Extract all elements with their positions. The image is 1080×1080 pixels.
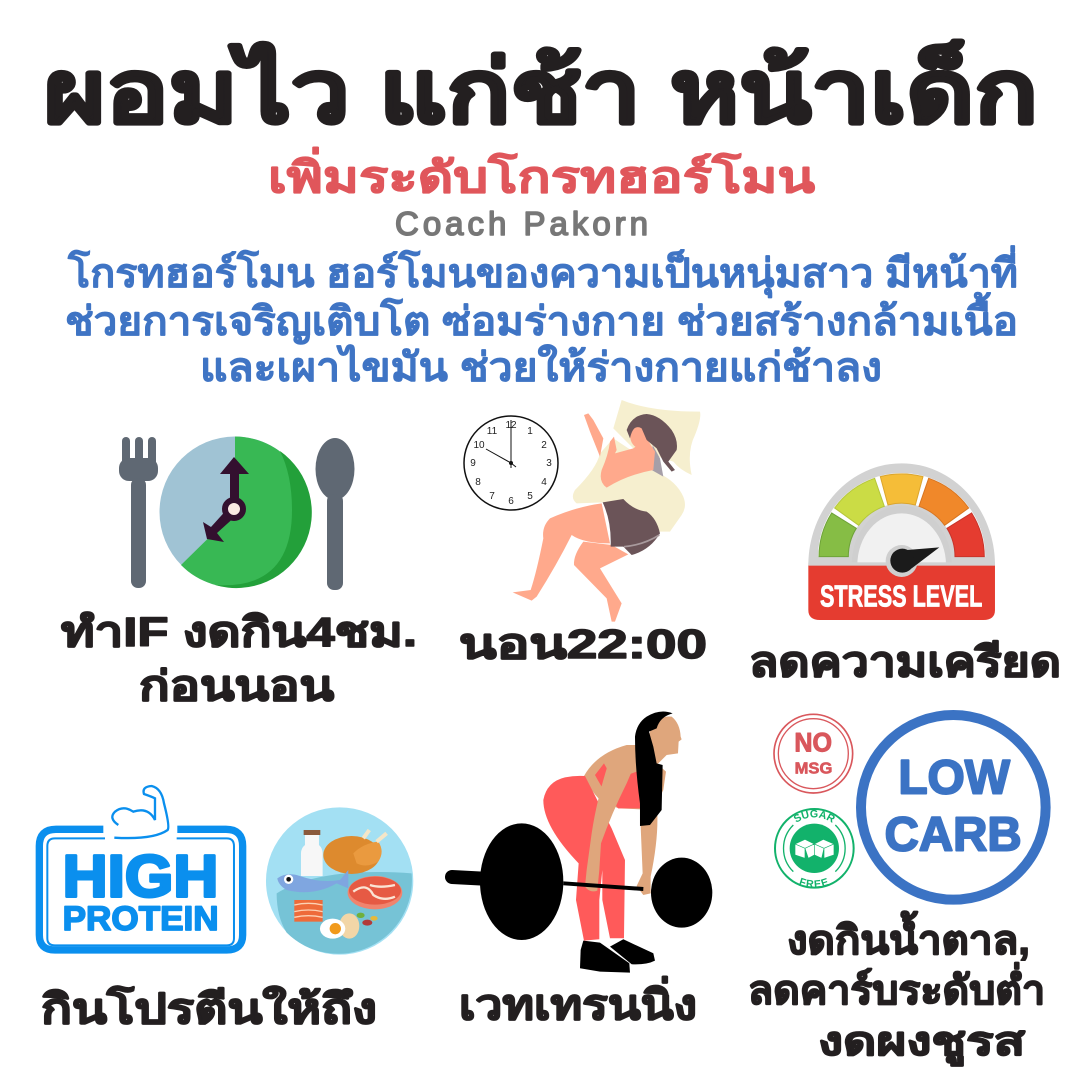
intro paragraph: และเผาไขมัน ช่วยให้ร่างกายแก่ช้าลง (200, 344, 882, 390)
icon: wall clock at ten (464, 416, 558, 510)
label: IF fasting: ทำIF งดกิน4ชม. (61, 609, 417, 655)
illustration: sleeping woman (513, 400, 700, 622)
badge: sugar free: FREE (800, 878, 828, 887)
intro paragraph: โกรทฮอร์โมน ฮอร์โมนของความเป็นหนุ่มสาว มีหน้าที่ (67, 245, 1018, 299)
icon: stress level gauge (808, 463, 995, 620)
icon: wall clock at ten: 6 (508, 496, 514, 507)
intro paragraph: ช่วยการเจริญเติบโต ซ่อมร่างกาย ช่วยสร้างกล้ามเนื้อ (65, 292, 1018, 345)
icon: stress level gauge: STRESS LEVEL (820, 580, 982, 614)
badge: no MSG: MSG (795, 760, 832, 777)
icon: wall clock at ten: 11 (487, 426, 498, 437)
label: sleep by 22:00: นอน22:00 (459, 621, 707, 667)
label: reduce stress: ลดความเครียด (749, 639, 1061, 685)
label: diet rules: งดผงชูรส (818, 1020, 1026, 1066)
icon: wall clock at ten: 9 (470, 458, 476, 469)
icon: wall clock at ten: 12 (505, 420, 517, 431)
label: diet rules (748, 911, 1045, 1066)
label: eat enough protein: กินโปรตีนให้ถึง (41, 985, 377, 1032)
icon: protein food plate (266, 807, 413, 955)
title: ผอมไว แก่ช้า หน้าเด็ก (44, 38, 1038, 141)
icon: intermittent fasting plate clock (119, 436, 354, 590)
subtitle: เพิ่มระดับโกรทฮอร์โมน (268, 147, 816, 202)
badge: high protein: HIGH (63, 843, 218, 910)
badge: low carb: CARB (885, 808, 1022, 862)
badge: low carb (861, 715, 1046, 900)
icon: wall clock at ten: 1 (527, 426, 533, 437)
label: weight training: เวทเทรนนิ่ง (459, 976, 697, 1028)
badge: sugar free: SUGAR (794, 810, 835, 823)
badge: sugar free (774, 808, 855, 889)
label: diet rules: งดกินน้ำตาล, (787, 911, 1030, 963)
icon: wall clock at ten: 5 (527, 491, 533, 502)
icon: wall clock at ten: 4 (541, 477, 547, 488)
icon: wall clock at ten: 10 (473, 440, 485, 451)
icon: wall clock at ten: 8 (475, 477, 481, 488)
icon: wall clock at ten: 3 (546, 458, 552, 469)
badge: high protein (39, 786, 243, 950)
badge: no MSG: NO (794, 728, 832, 758)
badge: low carb: LOW (898, 750, 1010, 804)
icon: wall clock at ten: 7 (489, 491, 495, 502)
label: IF fasting: ก่อนนอน (139, 663, 334, 709)
author name: Coach Pakorn (395, 205, 648, 242)
label: IF fasting (61, 609, 417, 709)
label: diet rules: ลดคาร์บระดับต่ำ (748, 962, 1045, 1013)
badge: high protein: PROTEIN (63, 900, 219, 938)
illustration: woman deadlifting barbell (452, 711, 712, 973)
icon: wall clock at ten: 2 (541, 440, 547, 451)
badge: no MSG (774, 714, 853, 793)
intro paragraph (65, 245, 1018, 390)
